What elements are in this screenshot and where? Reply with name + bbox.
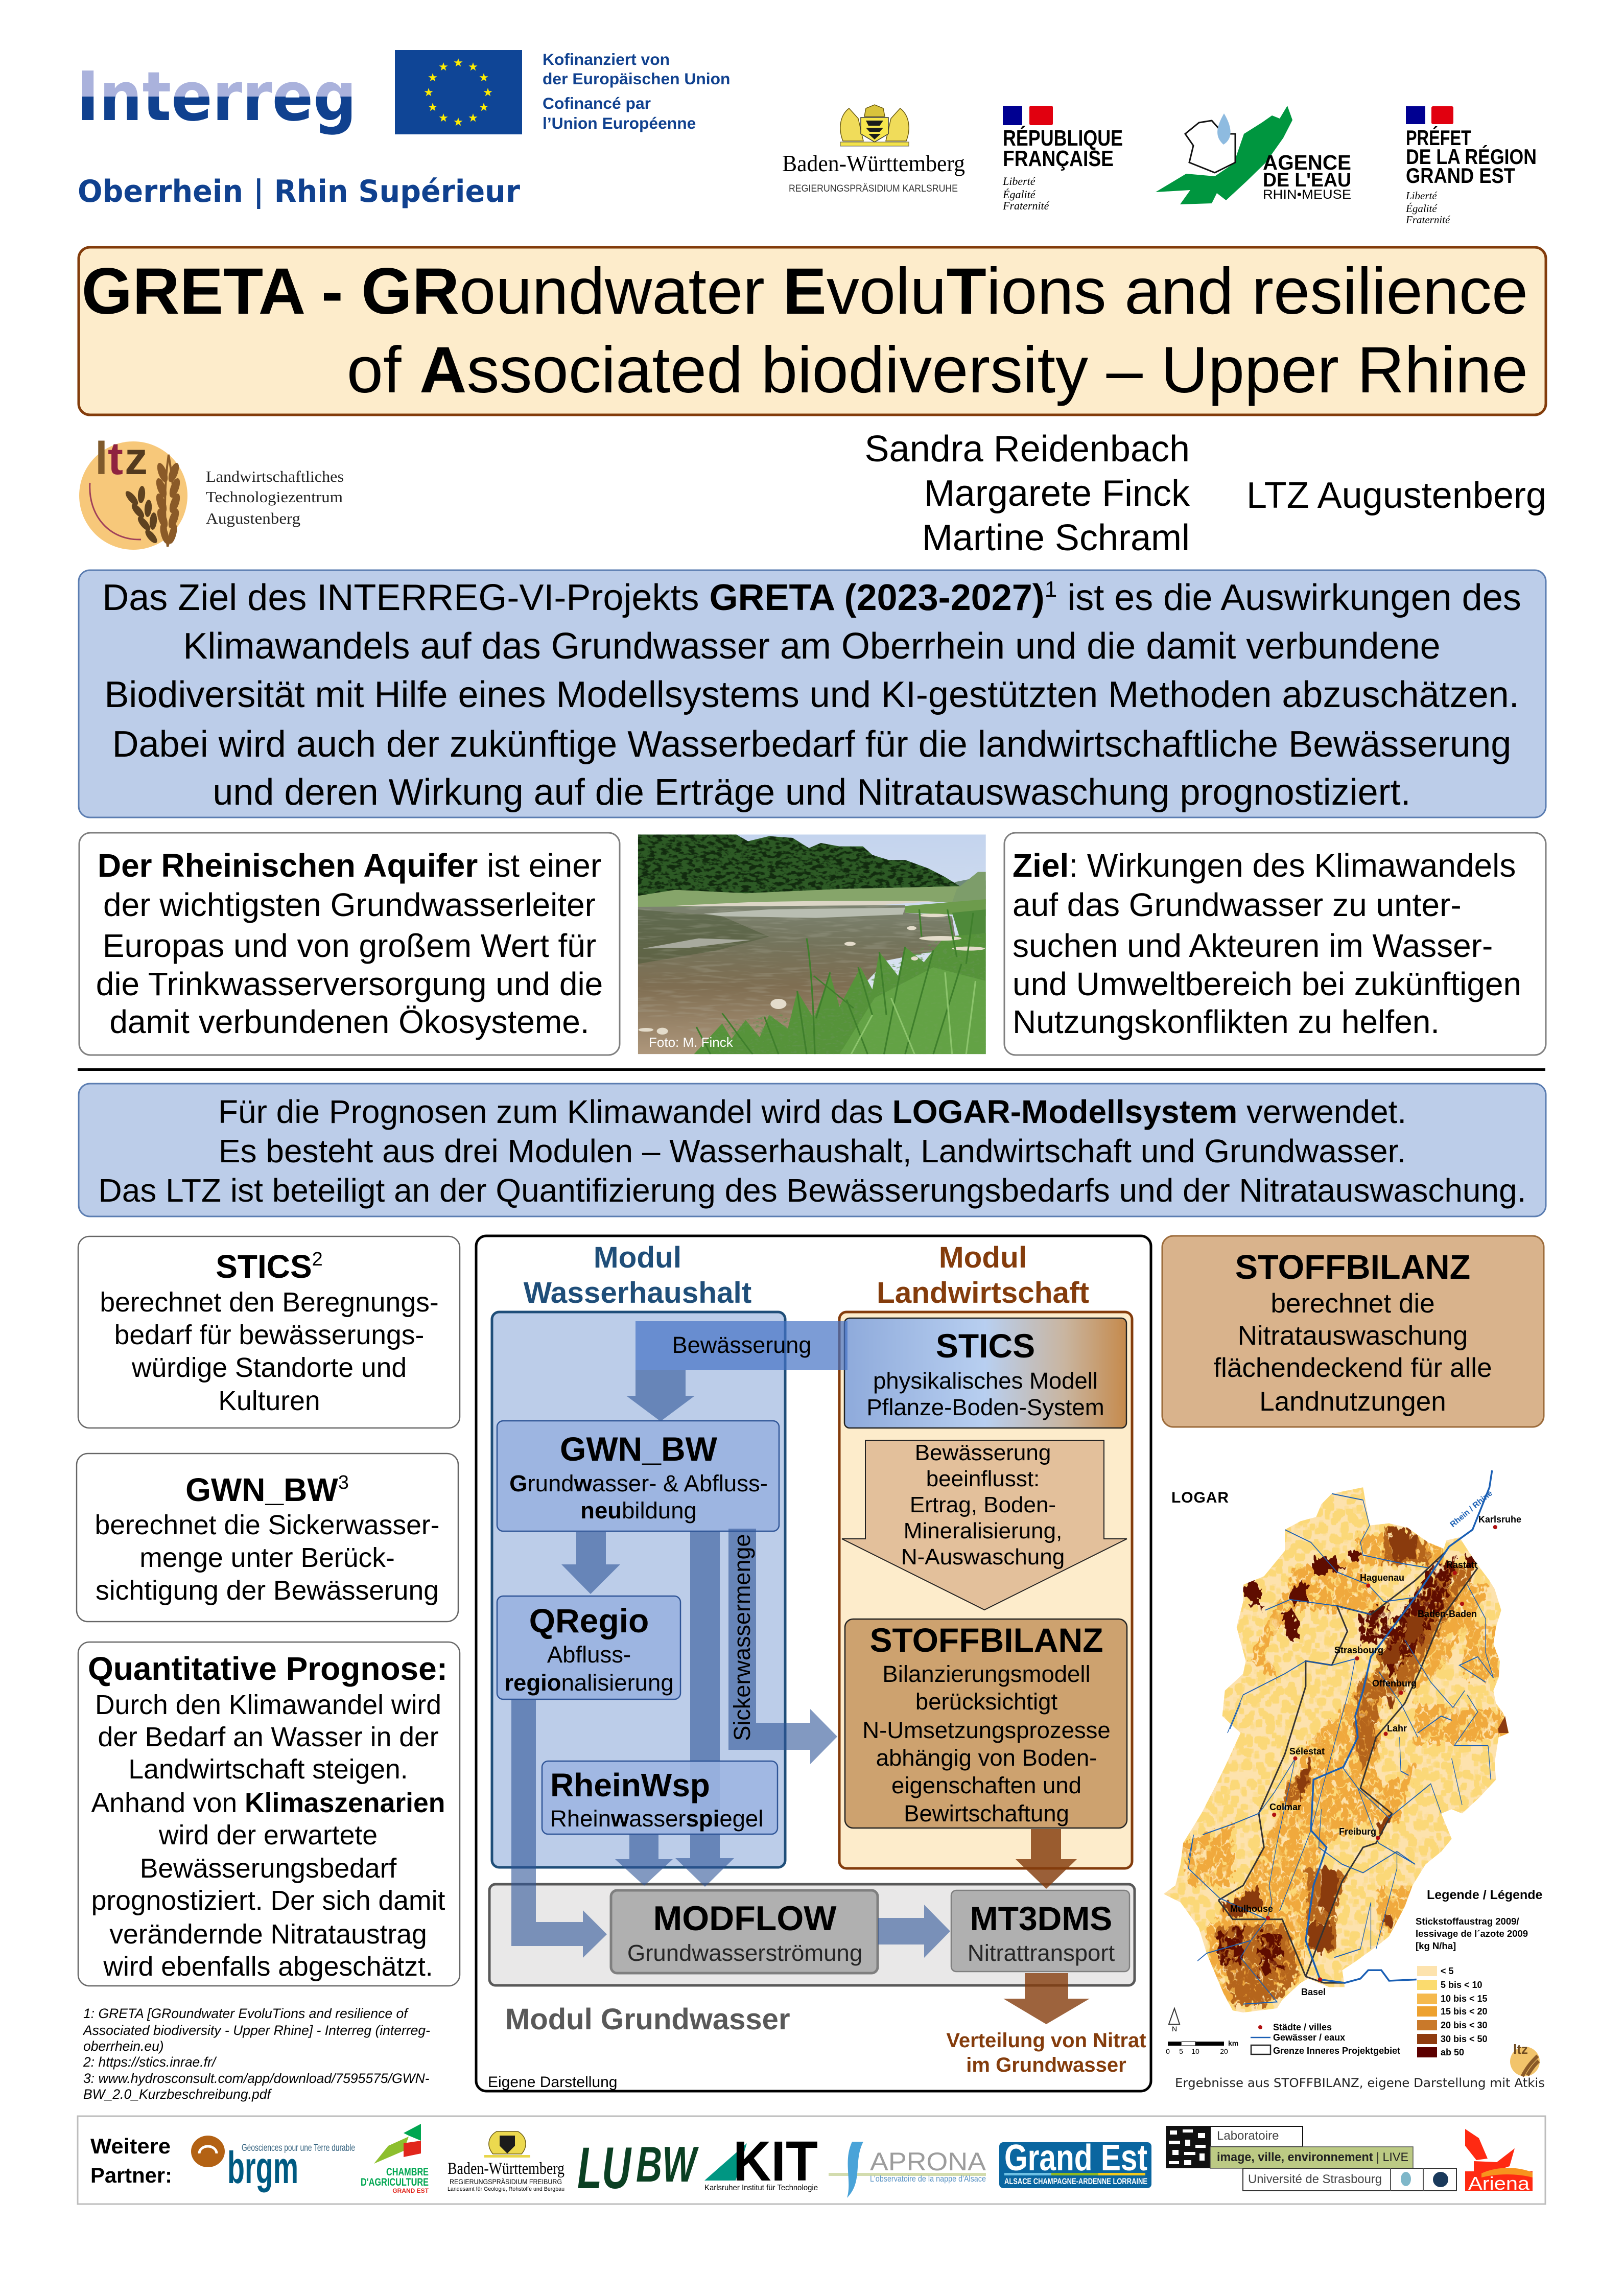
- text: EU co-financing note: Kofinanziert von: [543, 50, 670, 68]
- caption: Ergebnisse aus STOFFBILANZ, eigene Darstellung mit Atkis: [1175, 2076, 1545, 2090]
- footnotes: 3: www.hydrosconsult.com/app/download/7595575/GWN-: [83, 2071, 430, 2086]
- logo: APRONA: L'observatoire de la nappe d'Alsace: [870, 2174, 986, 2184]
- box: GWN_BW: neubildung: [580, 1497, 697, 1524]
- arrow: Sickerwassermenge: [728, 1529, 837, 1764]
- logo: République Française: Liberté: [1002, 175, 1036, 188]
- heading: Modul Wasserhaushalt: Wasserhaushalt: [524, 1276, 751, 1309]
- city labels: Karlsruhe: [1478, 1514, 1521, 1525]
- logo: Baden-Württemberg Karlsruhe: [782, 105, 965, 194]
- logo: LTZ Augustenberg: l: [95, 433, 108, 484]
- heading: Modul Wasserhaushalt: [524, 1241, 751, 1309]
- logo: APRONA: APRONA: [870, 2147, 986, 2176]
- panel: GWN_BW description: menge unter Berück-: [139, 1543, 395, 1573]
- footnotes: oberrhein.eu): [83, 2039, 164, 2054]
- icon: wheat ears: [124, 455, 182, 547]
- logo: Baden-Württemberg Karlsruhe: REGIERUNGSPRÄSIDIUM KARLSRUHE: [789, 183, 958, 194]
- source note: Eigene Darstellung: [488, 2074, 617, 2091]
- logo: Baden-Württemberg Freiburg: Landesamt für Geologie, Rohstoffe und Bergbau: [448, 2186, 564, 2192]
- authors: [865, 429, 1190, 558]
- panel: Rhine aquifer: der wichtigsten Grundwasserleiter: [103, 886, 596, 923]
- panel: Grundwasser module: [489, 1884, 1135, 1985]
- panel: project aim: Das Ziel des INTERREG-VI-Projekts GRETA (2023-2027): [102, 577, 1045, 618]
- panel: STICS description: bedarf für bewässerungs-: [114, 1320, 424, 1350]
- map legend: lessivage de l´azote 2009: [1416, 1928, 1528, 1939]
- box: MT3DMS: Nitrattransport: [968, 1940, 1115, 1966]
- chart: nitrogen leaching map: [1164, 1470, 1544, 2090]
- logo: LTZ Augustenberg: t: [108, 433, 123, 484]
- city labels: Baden-Baden: [1418, 1609, 1477, 1619]
- logo: Laboratoire LIVE: Université de Strasbourg: [1248, 2172, 1382, 2186]
- label: nitrate distribution: Verteilung von Nitrat: [946, 2029, 1146, 2052]
- box: STOFFBILANZ: N-Umsetzungsprozesse: [862, 1717, 1111, 1743]
- panel: STOFFBILANZ description: berechnet die: [1270, 1288, 1435, 1319]
- logo: Grand Est: Grand Est: [1004, 2138, 1147, 2178]
- logo: brgm: [191, 2136, 355, 2193]
- label: nitrate distribution: [946, 2029, 1146, 2076]
- panel: GWN_BW description: [77, 1454, 458, 1622]
- map legend: [kg N/ha]: [1416, 1940, 1456, 1951]
- arrow: GWN_BW to QRegio: [561, 1532, 620, 1594]
- panel: quantitative forecast: der Bedarf an Wasser in der: [98, 1722, 439, 1752]
- panel: project aim: und deren Wirkung auf die Erträge und Nitratauswaschung prognostiziert.: [213, 772, 1411, 813]
- city labels: Strasbourg: [1334, 1645, 1383, 1655]
- logo: LUBW: BW: [636, 2136, 699, 2192]
- panel: goal: auf das Grundwasser zu unter-: [1013, 886, 1462, 923]
- box: GWN_BW: [497, 1421, 779, 1531]
- logo: Préfet de la région Grand Est: PRÉFET: [1406, 126, 1471, 150]
- panel: STOFFBILANZ description: Landnutzungen: [1259, 1387, 1446, 1417]
- city labels: Rastatt: [1446, 1560, 1477, 1570]
- logo: LTZ Augustenberg: z: [125, 433, 148, 484]
- map key: cities, waters, boundary: Städte / villes: [1273, 2022, 1332, 2032]
- logo: République Française: RÉPUBLIQUE: [1003, 125, 1123, 151]
- logo: Interreg Oberrhein: [77, 58, 520, 209]
- panel: STOFFBILANZ description: [1162, 1236, 1544, 1427]
- text: EU co-financing note: [543, 50, 730, 132]
- arrow: Bewässerung: [626, 1321, 848, 1421]
- box: QRegio: regionalisierung: [504, 1670, 674, 1696]
- label: Weitere Partner: Weitere: [90, 2134, 171, 2158]
- panel: GWN_BW description: 3: [338, 1472, 349, 1493]
- icon: small LTZ logo: ltz: [1513, 2042, 1528, 2057]
- logo: LUBW: [577, 2136, 699, 2201]
- footnotes: Associated biodiversity - Upper Rhine] - Interreg (interreg-: [82, 2023, 430, 2038]
- panel: project aim: [79, 570, 1546, 817]
- city dots: [1266, 1525, 1497, 1982]
- panel: quantitative forecast: Bewässerungsbedarf: [140, 1854, 396, 1884]
- box: STOFFBILANZ: STOFFBILANZ: [869, 1621, 1103, 1659]
- arrow: GWN_BW to MODFLOW: [675, 1531, 734, 1887]
- panel: goal: Nutzungskonflikten zu helfen.: [1013, 1003, 1440, 1040]
- city labels: Sélestat: [1289, 1746, 1325, 1756]
- panel: STOFFBILANZ description: STOFFBILANZ: [1235, 1249, 1470, 1286]
- logo: Baden-Württemberg Freiburg: Baden-Württemberg: [448, 2160, 564, 2178]
- logo: Chambre d'agriculture: CHAMBRE: [386, 2166, 429, 2178]
- box: RheinWsp: RheinWsp: [550, 1767, 710, 1803]
- logo: LTZ Augustenberg: Augustenberg: [206, 509, 300, 527]
- panel: goal: [1004, 833, 1546, 1055]
- logo: Agence de l'eau Rhin-Meuse: RHIN•MEUSE: [1263, 188, 1351, 202]
- arrow: MT3DMS to groundwater nitrate: [1003, 1973, 1090, 2024]
- label: nitrate distribution: im Grundwasser: [966, 2054, 1126, 2076]
- arrow: QRegio to MODFLOW: [511, 1699, 607, 1958]
- logo: Préfet de la région Grand Est: Égalité: [1405, 202, 1438, 215]
- logo: KIT: Karlsruher Institut für Technologie: [704, 2184, 818, 2192]
- map legend: Stickstoffaustrag 2009/: [1416, 1916, 1519, 1927]
- panel: GWN_BW description: berechnet die Sickerwasser-: [95, 1510, 439, 1540]
- panel: STICS description: 2: [312, 1249, 323, 1270]
- city labels: Mulhouse: [1230, 1904, 1273, 1914]
- box: QRegio: QRegio: [529, 1602, 649, 1639]
- box: STOFFBILANZ: Bilanzierungsmodell: [882, 1661, 1091, 1687]
- logo: Agence de l'eau Rhin-Meuse: AGENCE: [1263, 151, 1351, 174]
- text: EU co-financing note: der Europäischen Union: [543, 69, 730, 88]
- north arrow: [1169, 2008, 1180, 2033]
- scale bar: km: [1228, 2039, 1238, 2047]
- footnotes: BW_2.0_Kurzbeschreibung.pdf: [83, 2087, 272, 2102]
- box: STOFFBILANZ: eigenschaften und: [891, 1772, 1081, 1798]
- logo: Préfet de la région Grand Est: [1405, 106, 1537, 226]
- arrow: MODFLOW to MT3DMS: [878, 1905, 950, 1958]
- logo: Préfet de la région Grand Est: GRAND EST: [1406, 163, 1515, 188]
- map key: cities, waters, boundary: [1251, 2022, 1400, 2056]
- map legend: 30 bis < 50: [1441, 2034, 1488, 2044]
- title banner: GRETA - GRoundwater EvoluTions and resilience: [82, 255, 1528, 328]
- logo: Laboratoire LIVE: image, ville, environnement | LIVE: [1217, 2150, 1408, 2164]
- scale bar: [1166, 2039, 1238, 2055]
- panel: GWN_BW description: sichtigung der Bewässerung: [96, 1576, 439, 1606]
- logo: Laboratoire LIVE: Laboratoire: [1217, 2129, 1279, 2143]
- box: Bewässerung beeinflusst: N-Auswaschung: [901, 1544, 1065, 1569]
- heading: Modul Landwirtschaft: [877, 1241, 1089, 1309]
- box: STOFFBILANZ: abhängig von Boden-: [876, 1745, 1097, 1771]
- box: QRegio: Abfluss-: [547, 1642, 631, 1668]
- panel: Rhine aquifer: [79, 833, 620, 1055]
- box: MT3DMS: MT3DMS: [970, 1900, 1112, 1937]
- arrow: Sickerwassermenge: Sickerwassermenge: [729, 1534, 755, 1741]
- arrow: Bewässerung: Bewässerung: [672, 1332, 811, 1358]
- panel: STOFFBILANZ description: Nitratauswaschung: [1238, 1321, 1468, 1351]
- box: Bewässerung beeinflusst: Bewässerung: [915, 1440, 1051, 1465]
- logo: Interreg Oberrhein: Interreg: [77, 58, 357, 136]
- logo: République Française: Fraternité: [1002, 199, 1050, 212]
- rivers: [1188, 1470, 1493, 2004]
- panel: goal: Ziel: Wirkungen des Klimawandels: [1013, 847, 1516, 884]
- map title: LOGAR: [1171, 1489, 1229, 1506]
- footnotes: [82, 2006, 430, 2102]
- text: EU co-financing note: Cofinancé par: [543, 94, 651, 112]
- panel: quantitative forecast: [78, 1642, 460, 1986]
- logo: Chambre d'agriculture: D'AGRICULTURE: [361, 2176, 429, 2188]
- arrow: STOFFBILANZ to MT3DMS: [1016, 1829, 1077, 1889]
- logo: Grand Est: [999, 2138, 1151, 2188]
- logo: Grand Est: ALSACE CHAMPAGNE-ARDENNE LORRAINE: [1004, 2176, 1147, 2186]
- label: Weitere Partner: [90, 2134, 172, 2187]
- panel: Wasserhaushalt module: [492, 1312, 785, 1867]
- panel: project aim: Klimawandels auf das Grundwasser am Oberrhein und die damit verbundene: [183, 626, 1441, 667]
- logo: LTZ Augustenberg: Technologiezentrum: [206, 488, 343, 506]
- city labels: Freiburg: [1339, 1826, 1376, 1837]
- city labels: [1230, 1489, 1521, 1997]
- label: Weitere Partner: Partner:: [90, 2163, 172, 2187]
- logo: Baden-Württemberg Freiburg: REGIERUNGSPRÄSIDIUM FREIBURG: [450, 2177, 562, 2186]
- panel: Rhine aquifer: die Trinkwasserversorgung und die: [96, 966, 603, 1002]
- logo: Chambre d'agriculture: GRAND EST: [392, 2187, 429, 2194]
- heading: Modul Landwirtschaft: Modul: [939, 1241, 1027, 1274]
- photo: Rhine river with grass: [638, 834, 986, 1054]
- panel: GWN_BW description: GWN_BW: [185, 1471, 338, 1508]
- panel: Rhine aquifer: damit verbundenen Ökosysteme.: [109, 1003, 590, 1040]
- panel: model system diagram: [476, 1236, 1151, 2091]
- panel: LOGAR model system: [79, 1084, 1546, 1216]
- logo: Préfet de la région Grand Est: Liberté: [1405, 190, 1438, 202]
- map legend: < 5: [1441, 1966, 1454, 1976]
- city labels: Basel: [1301, 1987, 1326, 1997]
- box: Bewässerung beeinflusst: Mineralisierung,: [904, 1518, 1062, 1543]
- affiliation: LTZ Augustenberg: [1246, 475, 1546, 516]
- map legend: 10 bis < 15: [1441, 1994, 1488, 2004]
- panel: STICS description: STICS: [216, 1248, 312, 1285]
- heading: Modul Wasserhaushalt: Modul: [594, 1241, 681, 1274]
- panel: quantitative forecast: Anhand von Klimaszenarien: [91, 1788, 445, 1818]
- panel: project aim: Dabei wird auch der zukünftige Wasserbedarf für die landwirtschaftliche Bewässerung: [112, 724, 1511, 765]
- arrow: RheinWsp to MODFLOW: [615, 1834, 673, 1886]
- panel: quantitative forecast: wird ebenfalls abgeschätzt.: [103, 1952, 433, 1982]
- panel: goal: suchen und Akteuren im Wasser-: [1013, 927, 1493, 964]
- scale bar: 5: [1179, 2047, 1183, 2055]
- panel: goal: und Umweltbereich bei zukünftigen: [1013, 966, 1521, 1002]
- panel: LOGAR model system: Für die Prognosen zum Klimawandel wird das LOGAR-Modellsystem verwendet.: [218, 1093, 1406, 1130]
- panel: quantitative forecast: Quantitative Prognose:: [88, 1650, 448, 1687]
- text: EU co-financing note: l’Union Européenne: [543, 114, 696, 132]
- authors: Margarete Finck: [924, 473, 1190, 514]
- logo: Interreg Oberrhein: Oberrhein | Rhin Supérieur: [78, 174, 520, 209]
- footnotes: 2: https://stics.inrae.fr/: [83, 2054, 217, 2070]
- box: MODFLOW: MODFLOW: [653, 1899, 837, 1938]
- box: RheinWsp: [542, 1761, 778, 1834]
- box: RheinWsp: Rheinwasserspiegel: [550, 1806, 763, 1832]
- map legend: 20 bis < 30: [1441, 2020, 1488, 2030]
- map key: cities, waters, boundary: Grenze Inneres Projektgebiet: [1273, 2046, 1400, 2056]
- project boundary: [1218, 1551, 1478, 1983]
- heading: Modul Landwirtschaft: Landwirtschaft: [877, 1276, 1089, 1309]
- title banner: [79, 247, 1546, 415]
- box: Bewässerung beeinflusst: beeinflusst:: [926, 1466, 1040, 1491]
- scale bar: 0: [1166, 2047, 1170, 2055]
- box: MT3DMS: [951, 1890, 1129, 1972]
- box: Bewässerung beeinflusst: [842, 1440, 1127, 1610]
- panel: STICS description: Kulturen: [218, 1386, 320, 1416]
- panel: project aim: 1: [1045, 577, 1057, 602]
- map legend: 15 bis < 20: [1441, 2006, 1488, 2017]
- logo: République Française: FRANÇAISE: [1003, 146, 1114, 171]
- logo: Préfet de la région Grand Est: DE LA RÉGION: [1406, 145, 1537, 169]
- map key: cities, waters, boundary: Gewässer / eaux: [1273, 2032, 1345, 2043]
- authors: Sandra Reidenbach: [865, 429, 1190, 470]
- map legend: Legende / Légende: [1427, 1888, 1543, 1902]
- box: STOFFBILANZ: Bewirtschaftung: [904, 1800, 1069, 1826]
- panel: project aim: Biodiversität mit Hilfe eines Modellsystems und KI-gestützten Methoden abzuschätzen.: [104, 674, 1519, 715]
- logo: Ariena: [1465, 2129, 1533, 2194]
- box: STOFFBILANZ: [845, 1619, 1127, 1828]
- logo: Agence de l'eau Rhin-Meuse: [1156, 106, 1351, 204]
- logo: Agence de l'eau Rhin-Meuse: DE L'EAU: [1263, 170, 1351, 191]
- authors: Martine Schraml: [922, 518, 1190, 558]
- footnotes: 1: GRETA [GRoundwater EvoluTions and resilience of: [83, 2006, 409, 2021]
- panel: quantitative forecast: wird der erwartete: [158, 1820, 378, 1850]
- logo: Baden-Württemberg Karlsruhe: Baden-Württemberg: [782, 150, 965, 176]
- scale bar: 20: [1220, 2047, 1228, 2055]
- box: GWN_BW: Grundwasser- & Abfluss-: [509, 1470, 768, 1496]
- logo: brgm: Géosciences pour une Terre durable: [242, 2143, 355, 2153]
- title banner: of Associated biodiversity – Upper Rhine: [347, 334, 1528, 407]
- box: GWN_BW: GWN_BW: [560, 1430, 718, 1468]
- city labels: Rhein / Rhine: [1449, 1489, 1494, 1529]
- icon: small LTZ logo: [1510, 2042, 1540, 2076]
- logo: République Française: Égalité: [1002, 188, 1036, 201]
- logo: Préfet de la région Grand Est: Fraternité: [1405, 214, 1451, 226]
- logo: LUBW: LU: [577, 2136, 632, 2201]
- logo: Baden-Württemberg Freiburg: [448, 2131, 564, 2192]
- city labels: Colmar: [1269, 1802, 1301, 1812]
- box: QRegio: [497, 1596, 680, 1699]
- panel: STICS description: [78, 1236, 460, 1428]
- city labels: Haguenau: [1360, 1573, 1404, 1583]
- logo: Chambre d'agriculture: [361, 2124, 429, 2194]
- box: MODFLOW: [611, 1890, 878, 1973]
- label: Modul Grundwasser: Modul Grundwasser: [505, 2003, 790, 2036]
- map legend: 5 bis < 10: [1441, 1980, 1482, 1990]
- panel: quantitative forecast: prognostiziert. Der sich damit: [91, 1886, 445, 1916]
- logo: APRONA: [829, 2142, 986, 2198]
- city labels: Offenburg: [1372, 1678, 1417, 1689]
- panel: STOFFBILANZ description: flächendeckend für alle: [1213, 1353, 1492, 1383]
- panel: project aim: ist es die Auswirkungen des: [1057, 577, 1521, 618]
- box: MODFLOW: Grundwasserströmung: [627, 1940, 862, 1966]
- box: STOFFBILANZ: berücksichtigt: [915, 1689, 1057, 1715]
- map body: [1164, 1470, 1509, 2012]
- panel: STICS description: würdige Standorte und: [131, 1353, 407, 1383]
- panel: quantitative forecast: verändernde Nitrataustrag: [109, 1919, 427, 1950]
- logo: LTZ Augustenberg: Landwirtschaftliches: [206, 467, 344, 485]
- panel: quantitative forecast: Durch den Klimawandel wird: [95, 1690, 441, 1720]
- logo: LTZ Augustenberg: [79, 433, 344, 550]
- panel: partners: [78, 2116, 1545, 2204]
- panel: Rhine aquifer: Der Rheinischen Aquifer ist einer: [98, 847, 601, 884]
- map legend: ab 50: [1441, 2047, 1464, 2057]
- map legend: [1416, 1888, 1543, 2057]
- box: STICS: [844, 1318, 1126, 1428]
- photo: Rhine river with grass: Foto: M. Finck: [649, 1035, 734, 1050]
- logo: EU flag: [395, 50, 522, 134]
- logo: Ariena: Ariena: [1468, 2173, 1530, 2194]
- scale bar: 10: [1191, 2047, 1199, 2055]
- panel: Rhine aquifer: Europas und von großem Wert für: [103, 927, 596, 964]
- logo: Laboratoire LIVE: [1166, 2126, 1456, 2191]
- panel: LOGAR model system: Das LTZ ist beteiligt an der Quantifizierung des Bewässerungsbedarfs und der Nitratauswaschung.: [99, 1172, 1526, 1209]
- panel: Landwirtschaft module: [839, 1312, 1132, 1868]
- box: STICS: STICS: [936, 1327, 1035, 1365]
- north arrow: N: [1172, 2025, 1177, 2033]
- box: STICS: physikalisches Modell: [873, 1368, 1098, 1394]
- box: Bewässerung beeinflusst: Ertrag, Boden-: [910, 1492, 1056, 1517]
- logo: République Française: [1002, 106, 1123, 212]
- logo: KIT: KIT: [733, 2130, 818, 2193]
- box: STICS: Pflanze-Boden-System: [866, 1394, 1104, 1420]
- logo: brgm: brgm: [227, 2142, 298, 2193]
- city labels: Lahr: [1387, 1723, 1407, 1733]
- panel: quantitative forecast: Landwirtschaft steigen.: [128, 1754, 408, 1785]
- panel: LOGAR model system: Es besteht aus drei Modulen – Wasserhaushalt, Landwirtschaft und Grundwasser.: [219, 1133, 1406, 1169]
- panel: STICS description: berechnet den Beregnungs-: [100, 1287, 439, 1318]
